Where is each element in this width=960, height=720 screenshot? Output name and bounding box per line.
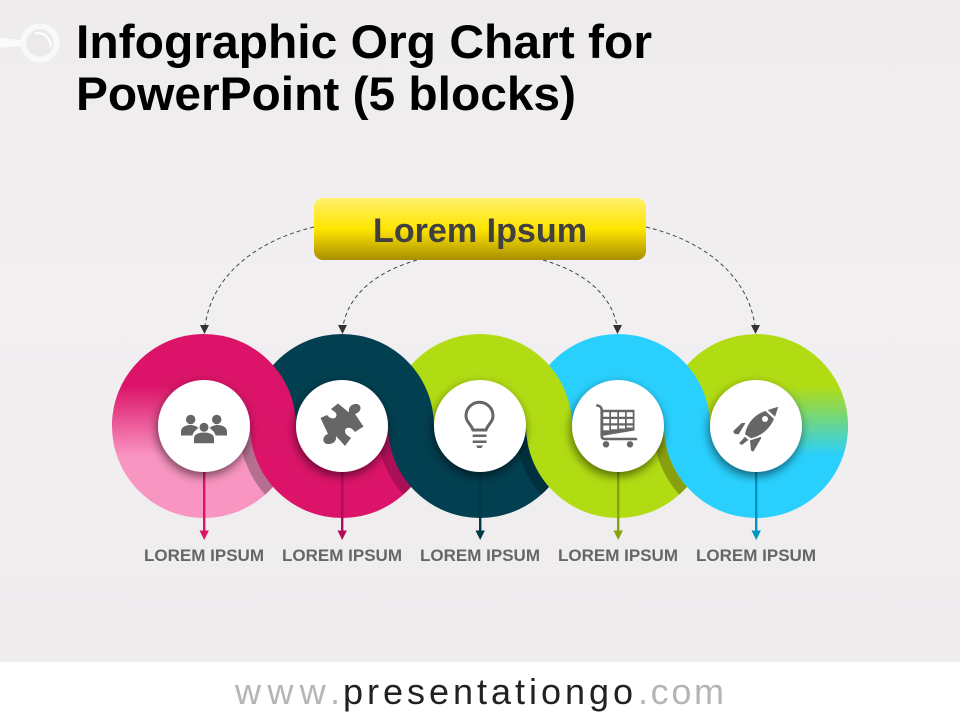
arrow 5 — [752, 470, 761, 540]
top box — [314, 198, 646, 260]
arrow 3 — [476, 470, 485, 540]
icon: rocket — [733, 407, 778, 452]
arrow 2 — [338, 470, 347, 540]
icon: people — [181, 415, 227, 443]
title: Infographic Org Chart for — [76, 15, 652, 68]
labels — [144, 546, 816, 565]
labels: LOREM IPSUM — [282, 546, 402, 565]
icon: light bulb — [466, 402, 493, 448]
footer band — [0, 662, 960, 720]
footer url: .com — [638, 671, 724, 712]
white discs — [158, 380, 802, 472]
woven ring band: upper halves — [112, 334, 848, 426]
icon: shopping cart — [597, 406, 636, 447]
connector arrowheads — [200, 325, 760, 334]
footer url — [234, 671, 724, 712]
dashed connectors — [205, 227, 755, 326]
top box: Lorem Ipsum — [373, 212, 587, 250]
woven ring band: lower halves — [112, 426, 848, 518]
labels: LOREM IPSUM — [420, 546, 540, 565]
title line 2: PowerPoint (5 blocks) — [76, 67, 576, 120]
arrow 4 — [614, 470, 623, 540]
labels: LOREM IPSUM — [144, 546, 264, 565]
footer url: www. — [234, 671, 340, 712]
labels: LOREM IPSUM — [558, 546, 678, 565]
arrow 1 — [200, 470, 209, 540]
logo: ring with line — [0, 26, 57, 60]
icon: puzzle piece — [320, 404, 364, 446]
labels: LOREM IPSUM — [696, 546, 816, 565]
footer url: presentationgo — [343, 671, 633, 712]
